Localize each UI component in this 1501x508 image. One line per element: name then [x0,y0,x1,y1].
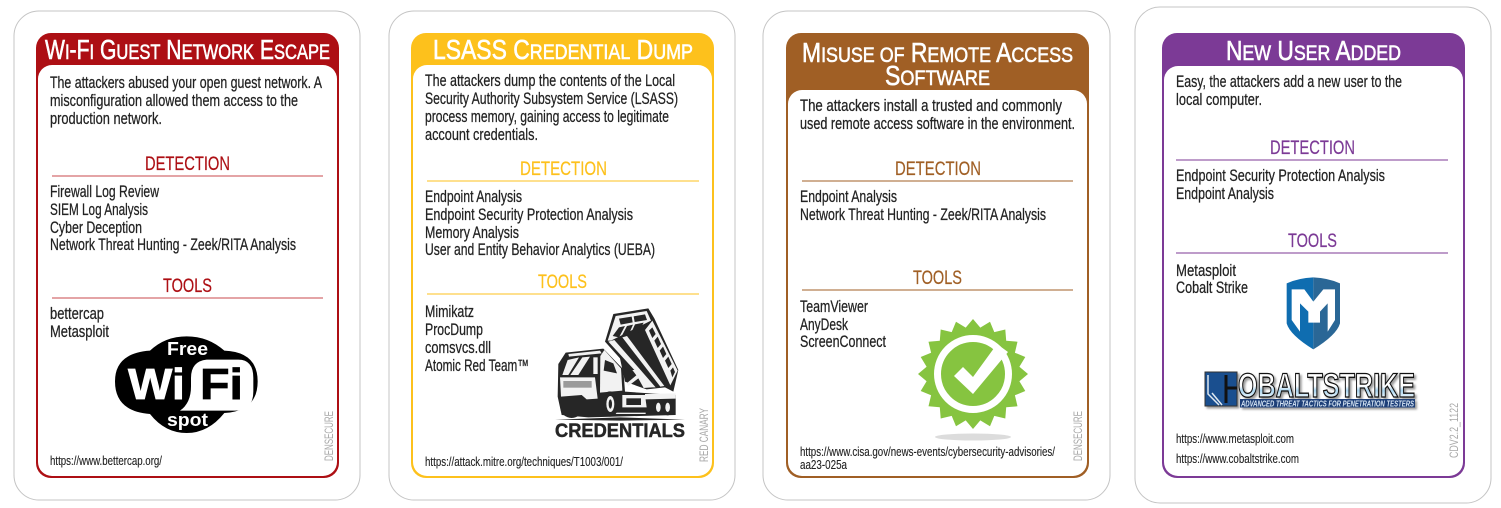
panel: LSASS Credential Dump card [389,11,735,500]
link: source url: https://www.bettercap.org/ [50,454,162,468]
icon: cobalt strike logo: ADVANCED THREAT TACTICS FOR PENETRATION TESTERS [1240,398,1414,408]
panel: Wi-Fi Guest Network Escape card [14,11,360,500]
heading: card title [802,37,1073,91]
heading: card title: MISUSE OF REMOTE ACCESS [802,37,1073,68]
text block: detection list [50,183,296,254]
icon: free wifi spot logo: Free [167,339,208,359]
heading: card title: SOFTWARE [885,60,990,91]
text block: detection list: Network Threat Hunting - Zeek/RITA Analysis [800,206,1046,224]
text block: description: process memory, gaining access to legitimate [425,108,669,126]
text block: detection list [425,188,655,259]
text block: description [50,74,322,128]
text block: detection list: User and Entity Behavior Analytics (UEBA) [425,241,655,259]
text block: description [425,72,678,144]
heading: detection: DETECTION [1270,137,1355,159]
text block: tools list [50,305,109,341]
tipper bed [605,308,678,392]
icon: free wifi spot logo: Fi [200,360,243,409]
text block: tools list: AnyDesk [800,316,849,334]
text block: description: Security Authority Subsystem Service (LSASS) [425,90,678,108]
heading: tools: TOOLS [913,267,962,289]
text block: tools list: Metasploit [1176,262,1236,280]
text block: tools list: Atomic Red Team™ [425,357,529,375]
icon: free wifi spot logo: spot [167,410,208,430]
credit: vertical label: CDV2.2_1122 [1449,403,1461,458]
text block: description: The attackers install a trusted and commonly [800,97,1063,115]
text block: tools list: ProcDump [425,321,483,339]
text block: detection list: Endpoint Analysis [1176,185,1274,203]
panel: New User Added card [1135,7,1491,503]
text block: description: account credentials. [425,126,538,144]
link: source urls [1176,432,1299,466]
text block: tools list [425,303,529,375]
text block: detection list: SIEM Log Analysis [50,201,148,219]
heading: tools: TOOLS [1288,230,1337,252]
link: source urls: https://www.cobaltstrike.com [1176,452,1299,466]
text block: detection list: Memory Analysis [425,224,519,242]
icon: cobalt strike logo [1205,367,1415,408]
heading: detection: DETECTION [520,158,607,180]
text block: description: misconfiguration allowed them access to the [50,92,298,110]
text block: tools list: bettercap [50,305,104,323]
text block: description [1176,73,1402,109]
icon: cobalt strike logo: OBALTSTRIKE [1238,367,1415,405]
icon: dump truck credentials: CREDENTIALS [555,420,685,442]
text block: detection list [1176,167,1385,203]
text block: description: used remote access software in the environment. [800,115,1075,133]
link: source url: aa23-025a [800,458,847,472]
icon: dump truck credentials [555,308,685,442]
text block: tools list: Mimikatz [425,303,474,321]
text block: tools list: TeamViewer [800,298,868,316]
icon: metasploit shield [1287,277,1340,349]
text block: tools list: comsvcs.dll [425,339,491,357]
text block: detection list: Endpoint Analysis [800,188,897,206]
heading: tools: TOOLS [163,275,212,297]
text block: description [800,97,1075,133]
text block: tools list: Metasploit [50,323,109,341]
link: source url: https://attack.mitre.org/techniques/T1003/001/ [425,455,623,469]
credit: vertical label: DENSECURE [324,411,336,461]
text block: detection list: Firewall Log Review [50,183,159,201]
text block: detection list: Endpoint Security Protection Analysis [425,206,633,224]
link: source url [800,445,1055,472]
text block: description: The attackers dump the contents of the Local [425,72,675,90]
heading: detection: DETECTION [145,153,230,175]
text block: tools list [800,298,886,351]
text block: detection list: Endpoint Analysis [425,188,522,206]
text block: detection list: Network Threat Hunting - Zeek/RITA Analysis [50,236,296,254]
heading: card title: NEW USER ADDED [1226,35,1401,66]
text block: description: Easy, the attackers add a new user to the [1176,73,1402,91]
link: source urls: https://www.metasploit.com [1176,432,1294,446]
text block: tools list [1176,262,1248,297]
panel: Misuse of Remote Access Software card [763,11,1110,500]
text block: description: production network. [50,110,162,128]
icon: free wifi spot logo [115,336,258,433]
credit: vertical label: DENSECURE [1073,411,1085,461]
text block: description: The attackers abused your open guest network. A [50,74,322,92]
link: source url: https://www.cisa.gov/news-events/cybersecurity-advisories/ [800,445,1055,459]
heading: tools: TOOLS [538,271,587,293]
heading: card title: LSASS CREDENTIAL DUMP [433,34,693,65]
icon: free wifi spot logo: Wi [128,360,185,409]
text block: tools list: ScreenConnect [800,333,886,351]
chassis and cab [558,349,676,417]
text block: detection list: Endpoint Security Protection Analysis [1176,167,1385,185]
text block: detection list: Cyber Deception [50,219,142,237]
heading: detection: DETECTION [895,158,981,180]
text block: tools list: Cobalt Strike [1176,279,1248,297]
text block: description: local computer. [1176,91,1262,109]
heading: card title: WI-FI GUEST NETWORK ESCAPE [45,34,330,65]
credit: vertical label: RED CANARY [699,408,711,462]
icon: green verified badge [918,319,1028,440]
wheels [560,391,672,418]
text block: detection list [800,188,1046,224]
